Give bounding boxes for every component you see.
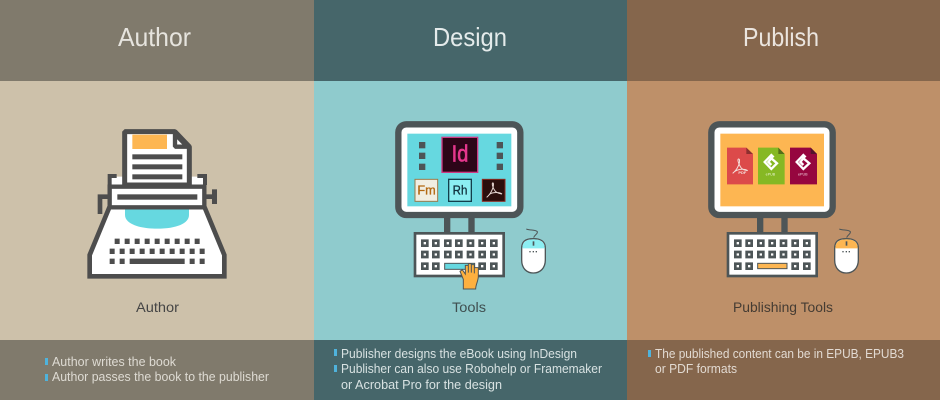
bullet list: publish: or PDF formats (655, 362, 737, 376)
icon: ePUB file: ePUB (766, 172, 776, 176)
heading: author: Author (118, 22, 191, 52)
bullet list: author: Author writes the book (52, 355, 177, 369)
icon: FrameMaker (415, 179, 438, 201)
bullet list: design: or Acrobat Pro for the design (341, 378, 502, 392)
caption: author: Author (136, 299, 179, 315)
icon: RoboHelp: Rh (453, 184, 467, 198)
icon: computer with authoring tools (398, 124, 545, 289)
icon: FrameMaker: Fm (417, 184, 436, 198)
bullet list: author (45, 355, 269, 384)
icon: RoboHelp (449, 179, 471, 201)
bullet list: author: Author passes the book to the publisher (52, 370, 269, 384)
bullet list: design: Publisher designs the eBook using InDesign (341, 347, 577, 361)
panel: design (314, 0, 627, 400)
panel: author (0, 0, 314, 400)
icon: InDesign: Id (452, 141, 468, 167)
bullet list: design: Publisher can also use Robohelp or Framemaker (341, 362, 602, 376)
bullet list: design (334, 347, 602, 392)
icon: computer with output formats (711, 124, 858, 276)
icon: typewriter (90, 132, 224, 276)
bullet list: publish (648, 347, 904, 376)
icon: InDesign (442, 137, 478, 172)
heading: publish: Publish (743, 22, 819, 52)
icon: PDF file (727, 148, 753, 184)
icon: ePUB file (758, 148, 785, 184)
caption: tools: Tools (452, 299, 486, 315)
icon: mouse (522, 229, 545, 273)
heading: design: Design (433, 22, 507, 52)
icon: PDF file: PDF (738, 170, 747, 175)
icon: hand (460, 264, 478, 289)
keyboard (415, 233, 504, 276)
icon: Acrobat (482, 179, 505, 201)
bullet list: publish: The published content can be in EPUB, EPUB3 (655, 347, 904, 361)
icon: mouse (835, 229, 858, 273)
caption: publishing tools: Publishing Tools (733, 299, 833, 315)
icon: ePUB3 file (790, 148, 817, 184)
keyboard (728, 233, 817, 276)
panel: publish (627, 0, 940, 400)
icon: ePUB3 file: ePUB (798, 172, 808, 176)
